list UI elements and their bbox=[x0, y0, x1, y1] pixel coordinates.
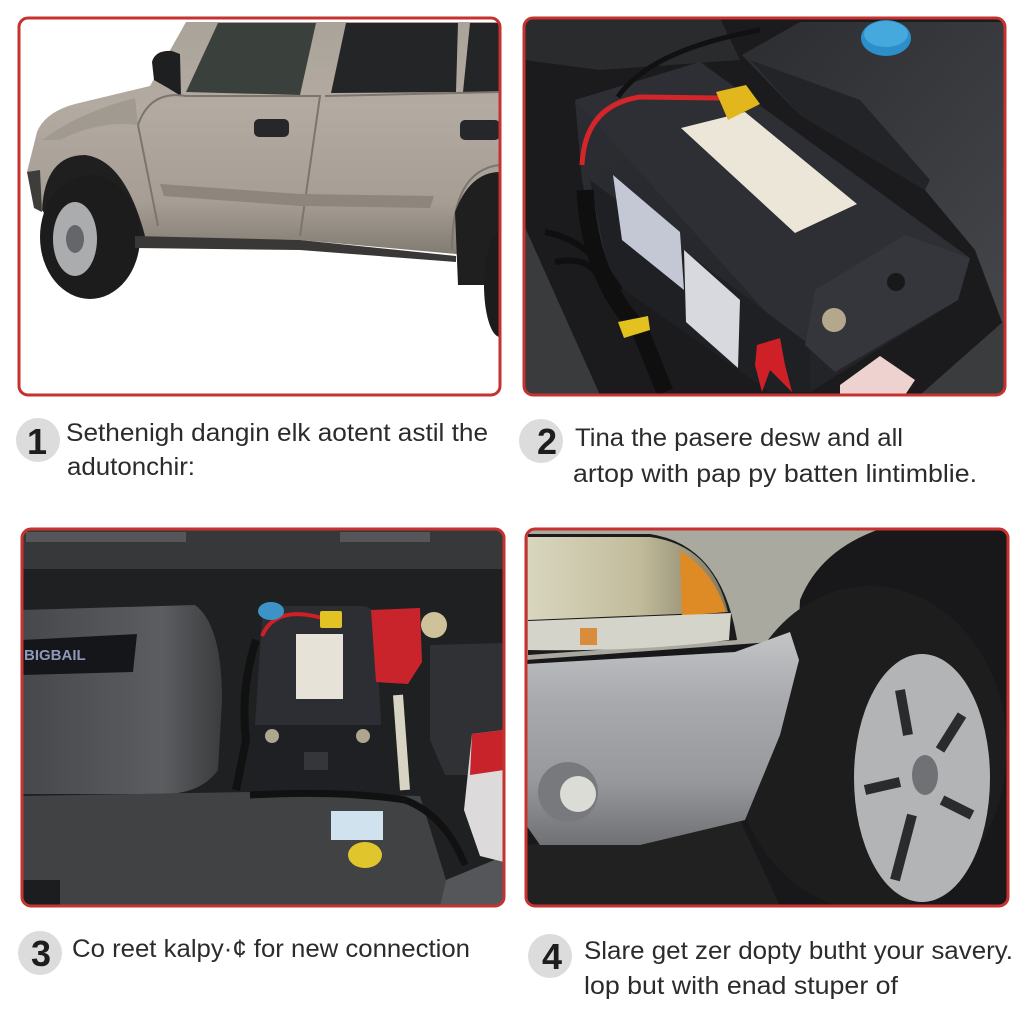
fog lamp bbox=[538, 762, 598, 822]
reservoir tank bbox=[742, 22, 1005, 330]
red cable and yellow clamp bbox=[262, 614, 322, 636]
wheel arch bbox=[42, 155, 145, 236]
battery corner block bbox=[805, 258, 970, 372]
panel: front wheel and headlight bbox=[526, 529, 1008, 910]
panel 4 border bbox=[526, 529, 1008, 906]
step 4 caption: lop but with enad stuper of bbox=[584, 972, 898, 1000]
red cable and yellow clamp bbox=[582, 97, 720, 165]
step 2 caption: Tina the pasere desw and all bbox=[575, 424, 903, 452]
battery top label bbox=[681, 112, 857, 233]
pipe bbox=[398, 695, 405, 790]
step 1 caption: Sethenigh dangin elk aotent astil the bbox=[66, 419, 488, 447]
step 3 badge bbox=[18, 931, 62, 975]
door handles bbox=[254, 119, 500, 140]
front wheel bbox=[40, 202, 140, 299]
side windows bbox=[186, 23, 500, 95]
headlight bbox=[528, 534, 737, 655]
bumper bbox=[526, 632, 799, 845]
terminals bbox=[265, 729, 279, 743]
terminal bbox=[822, 308, 846, 332]
underbody bbox=[135, 236, 456, 262]
battery bbox=[575, 62, 970, 392]
engine badge bbox=[22, 634, 137, 675]
blue cap bbox=[258, 602, 284, 620]
hood highlight bbox=[42, 98, 138, 140]
panel: battery close-up bbox=[524, 18, 1005, 395]
front bumper bbox=[27, 170, 42, 212]
red white reservoir bbox=[464, 730, 504, 862]
step 1 caption: adutonchir: bbox=[67, 453, 195, 481]
step 2 badge bbox=[519, 419, 563, 463]
fender bbox=[526, 529, 880, 660]
tire bbox=[733, 586, 1007, 910]
rear wheel bbox=[484, 285, 498, 337]
blue cap bbox=[861, 20, 911, 56]
lower left fender bbox=[524, 225, 600, 395]
truck body bbox=[27, 22, 500, 262]
black cables bbox=[585, 190, 665, 392]
red terminal bbox=[755, 338, 792, 392]
panel: engine bay bbox=[22, 529, 504, 906]
round cap bbox=[421, 612, 447, 638]
panel 2 border bbox=[524, 18, 1005, 395]
red fuse box bbox=[371, 608, 422, 684]
door moulding bbox=[160, 184, 434, 208]
rear wheel arch bbox=[455, 172, 500, 285]
engine badge: BIGBAIL bbox=[24, 647, 86, 664]
step 2 badge: 2 bbox=[537, 421, 557, 462]
side mirror bbox=[152, 51, 181, 96]
front shroud bbox=[22, 792, 446, 906]
step 4 badge bbox=[528, 934, 572, 978]
road bbox=[526, 820, 780, 906]
panel 1 border bbox=[19, 18, 500, 395]
yellow cap bbox=[348, 842, 382, 868]
dark box bbox=[430, 643, 504, 775]
panel 3 border bbox=[22, 529, 504, 906]
step 4 badge: 4 bbox=[542, 936, 562, 977]
step 4 caption: Slare get zer dopty butht your savery. bbox=[584, 937, 1013, 965]
battery bbox=[255, 606, 381, 770]
black cable bbox=[236, 640, 256, 790]
info sticker bbox=[331, 811, 383, 840]
engine cover bbox=[22, 605, 222, 794]
step 2 caption: artop with pap py batten lintimblie. bbox=[573, 460, 977, 488]
battery side labels bbox=[613, 175, 684, 290]
battery label bbox=[296, 634, 343, 699]
body trim lines bbox=[138, 92, 500, 250]
panel: truck side view bbox=[27, 22, 498, 337]
step 3 caption: Co reet kalpy·¢ for new connection bbox=[72, 935, 470, 963]
step 3 badge: 3 bbox=[31, 933, 51, 974]
step 1 badge: 1 bbox=[27, 421, 47, 462]
step 1 badge bbox=[16, 418, 60, 462]
